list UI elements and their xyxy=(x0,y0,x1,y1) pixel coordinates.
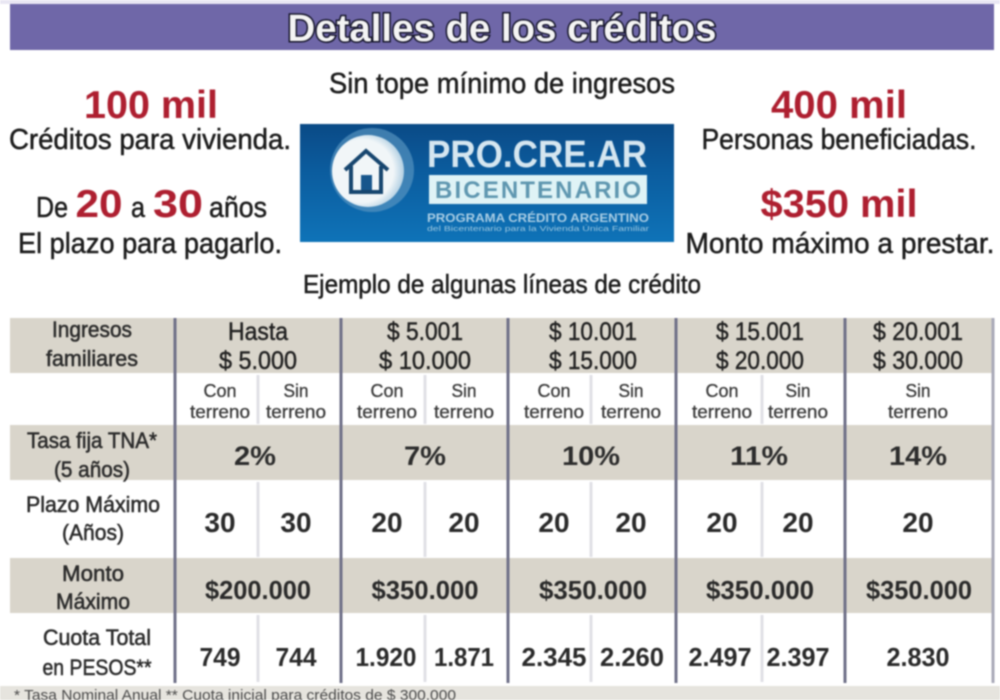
row: con / sin terreno: terreno xyxy=(524,402,584,422)
stat: 20 a 30 años xyxy=(18,183,282,260)
stat: 20 a 30 años: años xyxy=(209,192,267,224)
row: ingresos familiares: $ 30.000 xyxy=(873,347,963,375)
title banner xyxy=(10,4,994,50)
row: cuota total: 749 xyxy=(200,642,240,672)
row: monto máximo: $350.000 xyxy=(866,575,972,605)
row: tasa fija: 2% xyxy=(234,441,276,471)
row: con / sin terreno xyxy=(190,381,948,422)
row: con / sin terreno: terreno xyxy=(888,402,948,422)
table xyxy=(10,317,994,683)
stat: 20 a 30 años: a xyxy=(131,192,146,224)
row: con / sin terreno: terreno xyxy=(692,402,752,422)
row: plazo máximo: 20 xyxy=(371,507,403,538)
row: cuota total: 2.830 xyxy=(886,642,950,672)
row: tasa fija: 11% xyxy=(730,441,788,471)
stat: 350 mil monto: Monto máximo a prestar. xyxy=(686,228,994,260)
stat: 350 mil monto: $350 mil xyxy=(760,183,918,226)
subtitle: sin tope mínimo: Sin tope mínimo de ingresos xyxy=(329,68,675,100)
row: ingresos familiares: familiares xyxy=(46,346,138,371)
row: con / sin terreno: terreno xyxy=(434,402,494,422)
row: con / sin terreno: Con xyxy=(706,381,738,401)
row: monto máximo: $200.000 xyxy=(205,575,311,605)
row: monto máximo: Monto xyxy=(62,561,124,586)
row: cuota total: 1.871 xyxy=(434,642,494,672)
stat: 100 mil créditos xyxy=(9,84,291,156)
row: ingresos familiares: Ingresos xyxy=(52,317,132,342)
row: plazo máximo: (Años) xyxy=(62,520,124,545)
logo: PRO.CRE.AR Bicentenario: PRO.CRE.AR xyxy=(427,134,647,176)
row: con / sin terreno: Sin xyxy=(906,381,930,401)
row: ingresos familiares: $ 20.000 xyxy=(716,347,804,375)
row: tasa fija: 7% xyxy=(404,441,446,471)
stat: 20 a 30 años: 30 xyxy=(153,183,203,226)
row: plazo máximo: 30 xyxy=(280,507,312,538)
row: tasa fija: 10% xyxy=(562,441,620,471)
row: monto máximo: Máximo xyxy=(56,589,130,614)
stat: 400 mil personas xyxy=(702,84,976,156)
row: tasa fija: 14% xyxy=(889,441,947,471)
row: plazo máximo: 20 xyxy=(902,507,934,538)
row: con / sin terreno: Sin xyxy=(452,381,476,401)
stat: 20 a 30 años: El plazo para pagarlo. xyxy=(18,228,282,260)
row: con / sin terreno: Con xyxy=(370,381,404,401)
row: con / sin terreno: terreno xyxy=(601,402,661,422)
row: cuota total xyxy=(42,625,950,680)
row: monto máximo: $350.000 xyxy=(706,575,814,605)
row: cuota total: 2.260 xyxy=(600,642,664,672)
row: tasa fija xyxy=(27,428,947,482)
title banner: Detalles de los créditos xyxy=(288,8,716,50)
row: cuota total: 2.345 xyxy=(522,642,586,672)
row: monto máximo: $350.000 xyxy=(539,575,647,605)
stat: 350 mil monto xyxy=(686,183,994,260)
row: con / sin terreno: Con xyxy=(204,381,236,401)
logo: PRO.CRE.AR Bicentenario: BICENTENARIO xyxy=(435,177,641,204)
icon: house in circle xyxy=(330,128,414,212)
row: ingresos familiares: $ 15.000 xyxy=(549,347,637,375)
row: con / sin terreno: terreno xyxy=(190,402,250,422)
row: plazo máximo: 20 xyxy=(706,507,738,538)
row: plazo máximo xyxy=(26,492,934,545)
row: con / sin terreno: Sin xyxy=(618,381,644,401)
stat: 400 mil personas: 400 mil xyxy=(771,84,907,127)
row: ingresos familiares: $ 10.000 xyxy=(379,347,471,375)
stat: 20 a 30 años: De xyxy=(36,192,68,224)
logo: PRO.CRE.AR Bicentenario: PROGRAMA CRÉDITO ARGENTINO xyxy=(427,212,649,225)
row: con / sin terreno: terreno xyxy=(266,402,326,422)
row: ingresos familiares: Hasta xyxy=(228,318,288,346)
row: ingresos familiares xyxy=(46,317,963,375)
row: monto máximo xyxy=(56,561,972,614)
row: con / sin terreno: terreno xyxy=(768,402,828,422)
row: con / sin terreno: Sin xyxy=(786,381,810,401)
row: cuota total: 2.497 xyxy=(688,642,752,672)
row: tasa fija: (5 años) xyxy=(54,457,130,482)
logo: PRO.CRE.AR Bicentenario: del Bicentenario para la Vivienda Única Familiar xyxy=(427,224,650,233)
stat: 100 mil créditos: 100 mil xyxy=(84,84,218,127)
logo: PRO.CRE.AR Bicentenario xyxy=(300,124,674,242)
subtitle: ejemplo de líneas: Ejemplo de algunas líneas de crédito xyxy=(303,269,701,299)
row: ingresos familiares: $ 20.001 xyxy=(873,318,963,346)
row: cuota total: en PESOS** xyxy=(42,655,152,680)
stat: 100 mil créditos: Créditos para vivienda. xyxy=(9,124,291,156)
row: con / sin terreno: Con xyxy=(538,381,570,401)
row: plazo máximo: 20 xyxy=(448,507,480,538)
row: cuota total: 2.397 xyxy=(766,642,830,672)
row: plazo máximo: Plazo Máximo xyxy=(26,492,160,517)
row: tasa fija: Tasa fija TNA* xyxy=(27,428,157,453)
row: plazo máximo: 20 xyxy=(615,507,647,538)
stat: 400 mil personas: Personas beneficiadas. xyxy=(702,124,976,156)
row: plazo máximo: 20 xyxy=(782,507,814,538)
row: con / sin terreno: Sin xyxy=(284,381,308,401)
row: cuota total: 744 xyxy=(276,642,317,672)
stat: 20 a 30 años: 20 xyxy=(76,183,122,226)
row: ingresos familiares: $ 5.001 xyxy=(387,318,463,346)
row: con / sin terreno: terreno xyxy=(357,402,417,422)
row: ingresos familiares: $ 15.001 xyxy=(716,318,804,346)
row: ingresos familiares: $ 10.001 xyxy=(549,318,637,346)
footnote xyxy=(0,686,1000,700)
row: ingresos familiares: $ 5.000 xyxy=(219,347,297,375)
row: plazo máximo: 20 xyxy=(538,507,570,538)
row: cuota total: 1.920 xyxy=(356,642,416,672)
row: monto máximo: $350.000 xyxy=(372,575,478,605)
row: plazo máximo: 30 xyxy=(204,507,236,538)
row: cuota total: Cuota Total xyxy=(43,625,151,650)
